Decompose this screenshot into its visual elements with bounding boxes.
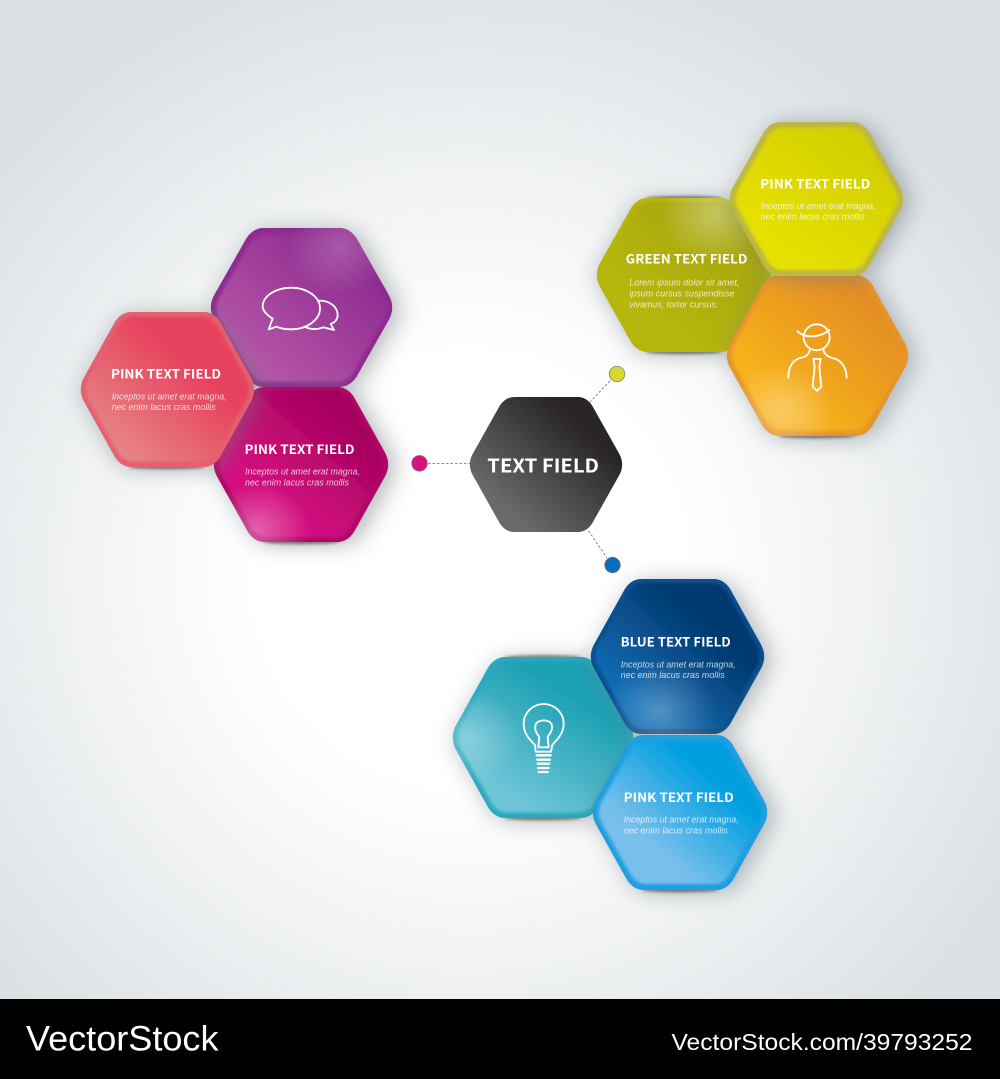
hexagon: olive: ipsum cursus suspendisse	[629, 289, 734, 300]
hexagon: magenta: PINK TEXT FIELD	[244, 439, 354, 458]
connector: blue dot	[586, 527, 620, 573]
icon: speech bubbles	[263, 288, 338, 330]
hexagon: purple with chat icon	[211, 228, 398, 390]
hexagon: teal with bulb icon	[453, 655, 638, 820]
hexagon: yellow: PINK TEXT FIELD	[760, 173, 870, 192]
central hexagon	[470, 397, 622, 532]
hexagon: magenta	[214, 387, 394, 544]
icon: light bulb	[524, 704, 564, 772]
hexagon: olive: GREEN TEXT FIELD	[626, 248, 747, 267]
hexagon: navy: nec enim lacus cras mollis	[621, 670, 725, 681]
hexagon: magenta: Inceptos ut amet erat magna,	[245, 467, 360, 478]
hexagon: yellow	[730, 122, 909, 278]
hexagon: olive: Lorem ipsum dolor sit amet,	[629, 278, 739, 289]
hexagon: olive: vivamus, tortor cursus.	[629, 300, 718, 311]
hexagon: yellow: nec enim lacus cras mollis	[761, 212, 865, 223]
panel: bottom cluster	[453, 579, 773, 892]
connector: pink dot	[412, 456, 470, 471]
hexagon: sky blue	[593, 735, 773, 892]
hexagon: coral: Inceptos ut amet erat magna,	[112, 392, 227, 402]
hexagon: navy	[591, 579, 770, 736]
footer logo text: VectorStock	[26, 1020, 219, 1058]
panel: left cluster	[81, 228, 398, 544]
hexagon: coral	[81, 312, 258, 470]
icon: person with tie	[788, 324, 847, 391]
hexagon: orange with person icon	[727, 275, 914, 438]
hexagon: sky blue: nec enim lacus cras mollis	[624, 825, 728, 836]
hexagon: coral: nec enim lacus cras mollis	[112, 402, 216, 413]
hexagon: navy: BLUE TEXT FIELD	[621, 632, 731, 651]
connector: olive dot	[590, 366, 625, 402]
hexagon: navy: Inceptos ut amet erat magna,	[621, 659, 736, 670]
footer url text: VectorStock.com/39793252	[672, 1029, 972, 1055]
footer bar	[0, 999, 1000, 1079]
central title: TEXT FIELD	[487, 452, 599, 478]
hexagon: yellow: Inceptos ut amet erat magna,	[761, 201, 876, 212]
hexagon: olive	[597, 196, 774, 354]
hexagon: coral: PINK TEXT FIELD	[111, 364, 221, 383]
hexagon: sky blue: Inceptos ut amet erat magna,	[624, 815, 739, 826]
hexagon: sky blue: PINK TEXT FIELD	[624, 787, 734, 806]
hexagon: magenta: nec enim lacus cras mollis	[245, 477, 349, 488]
panel: top-right cluster	[597, 122, 914, 438]
